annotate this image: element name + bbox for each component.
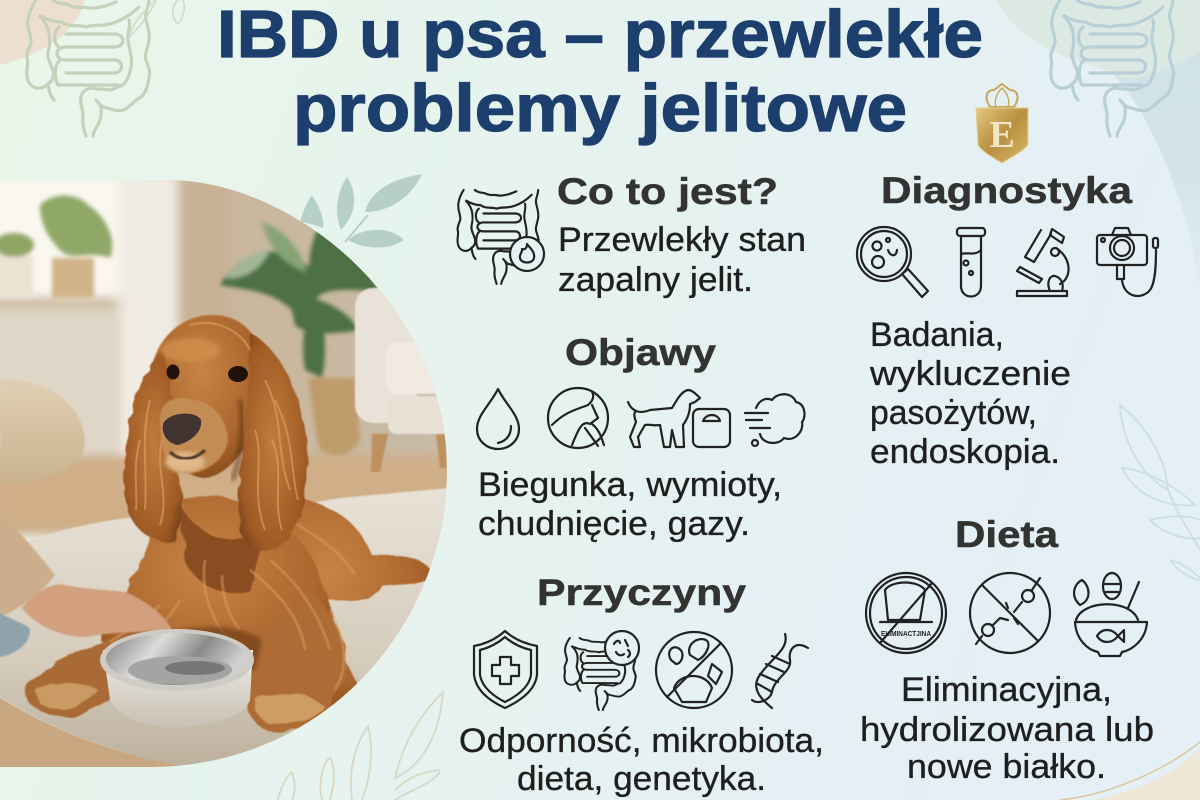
dog left paw and leg [24, 634, 126, 719]
dog: fur group [25, 496, 432, 732]
section: Przyczyny: dieta, genetyka. [517, 760, 766, 798]
icon: dog and weighing scale [628, 390, 730, 447]
eyes [166, 364, 248, 382]
decoration: bottom right corner [1060, 742, 1200, 800]
bowl [100, 629, 254, 727]
icon: gas cloud [745, 394, 804, 446]
section: Dieta [860, 514, 1154, 786]
icon: forbidden food [656, 632, 732, 708]
nose [163, 414, 201, 445]
watermark: intestine top right [1051, 0, 1174, 136]
mouth [170, 450, 205, 459]
icon: intestine with microbiota [564, 631, 639, 710]
icon: DNA helix [752, 634, 808, 708]
body text: Odporność, mikrobiota, [459, 722, 824, 760]
dog body [100, 494, 334, 680]
body text: hydrolizowana lub [860, 711, 1154, 749]
room background [0, 170, 460, 535]
icon: magnifier [857, 227, 928, 297]
dog left ear [124, 350, 182, 541]
dog right ear [238, 333, 308, 551]
icon: elimination diet: ELIMINACTJINA [881, 629, 931, 638]
heading: Dieta [955, 514, 1058, 555]
dog shadow between legs [176, 624, 263, 672]
section: Co to jest [458, 171, 806, 299]
heading: Co to jest? [557, 171, 778, 212]
section: Co to jest: zapalny jelit. [558, 261, 753, 299]
title: problemy jelitowe [293, 71, 907, 146]
section: Objawy [477, 332, 804, 543]
body text: Badania, [870, 316, 1004, 354]
room plant [220, 222, 378, 456]
muzzle [160, 398, 228, 473]
section: Objawy: chudnięcie, gazy. [478, 505, 750, 543]
dog right paw and leg [248, 590, 347, 732]
icon: water drop [477, 389, 519, 449]
decorative corner shape: blue right [1100, 30, 1200, 300]
logo: golden crest: E [989, 114, 1015, 156]
title [217, 0, 983, 146]
brow [160, 338, 220, 362]
dog chest highlights [110, 520, 355, 690]
icon: test tube [957, 228, 985, 296]
photo: dog with bowl [0, 170, 460, 770]
icon: food bowl with fish [1074, 573, 1147, 656]
armchair [355, 288, 458, 472]
body text: endoskopia. [870, 433, 1060, 471]
watermark: intestine top left [27, 0, 150, 136]
dog back and tail [290, 498, 430, 706]
body text: nowe białko. [907, 748, 1106, 786]
window plants [0, 196, 112, 298]
heading: Diagnostyka [881, 170, 1132, 211]
body text [869, 316, 1071, 471]
icon: intestine with flame [458, 190, 544, 284]
section: Przyczyny [459, 572, 824, 798]
body text: Eliminacyjna, [901, 671, 1112, 709]
heading: Przyczyny [537, 572, 746, 613]
body text: Biegunka, wymioty, [478, 466, 782, 504]
pouf [0, 380, 85, 484]
decorative corner shape: beige top left [0, 0, 85, 65]
leaves: photo top right [300, 174, 422, 248]
jeans [0, 610, 30, 658]
leaves: outline right edge [1120, 405, 1200, 580]
icon: microscope [1017, 229, 1069, 296]
section: Diagnostyka [857, 170, 1158, 471]
hand [22, 584, 172, 637]
decorative corner shape: green top right [996, 0, 1200, 80]
body text: wykluczenie [869, 355, 1071, 393]
ear fur strands [136, 323, 298, 530]
icon: endoscope camera [1097, 228, 1158, 296]
icon: vomiting [548, 388, 608, 448]
rug [0, 488, 450, 770]
leaves: outline bottom of photo [278, 692, 443, 800]
icon: shield with cross [474, 631, 537, 708]
icon: broken protein chain [970, 573, 1050, 653]
icon: elimination diet [866, 573, 946, 653]
ear inner shadow [232, 400, 242, 480]
dog head [150, 315, 265, 478]
body text: Przewlekły stan [558, 221, 806, 259]
watermark: leaves top [128, 0, 184, 38]
muzzle pale [165, 452, 205, 472]
sweater [0, 529, 56, 616]
heading: Objawy [565, 332, 716, 373]
dog neck dark [180, 505, 265, 593]
body text: pasożytów, [870, 394, 1037, 432]
logo: golden crest [976, 84, 1028, 163]
body text [860, 671, 1154, 786]
